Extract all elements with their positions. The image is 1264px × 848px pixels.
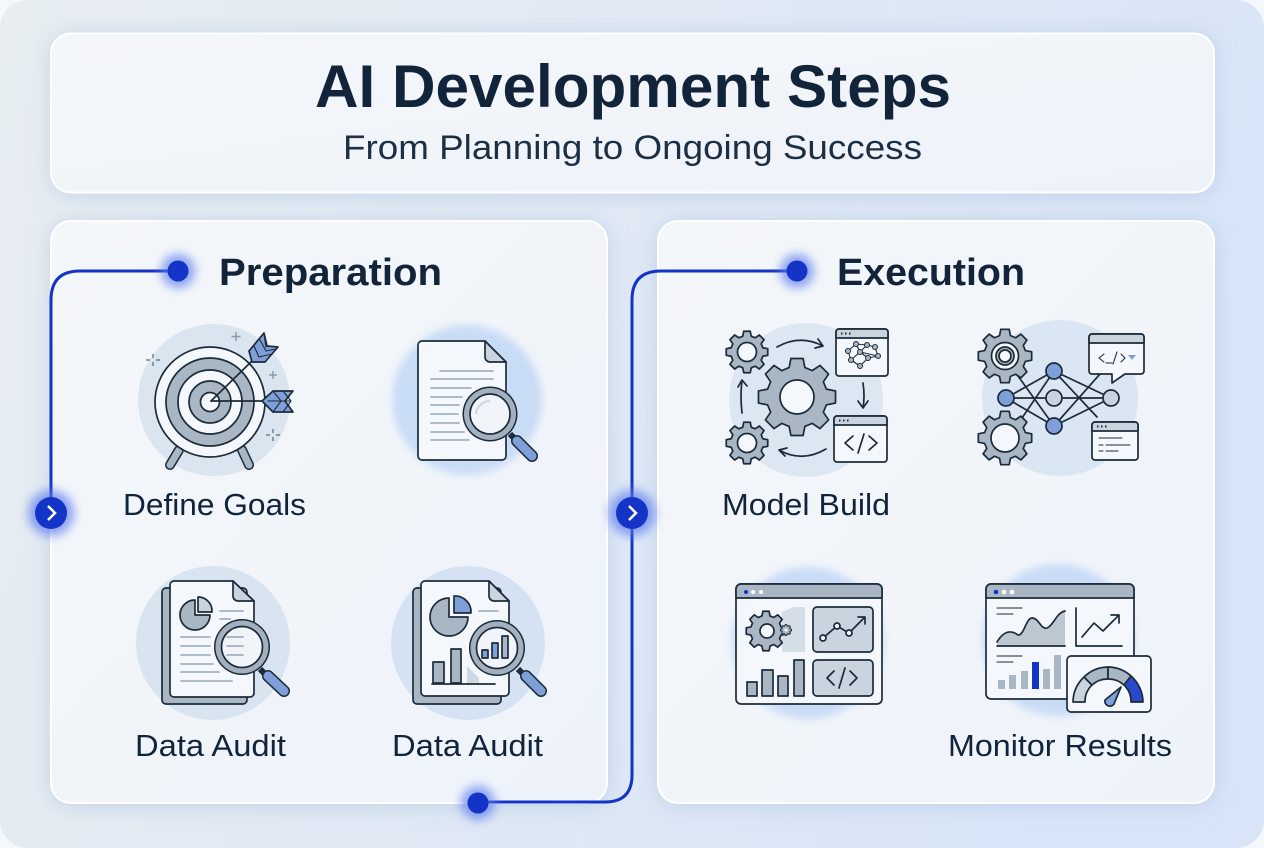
heading: main title: AI Development Steps <box>315 53 951 120</box>
node: preparation chevron <box>28 490 74 536</box>
icon: document with magnifier <box>392 325 542 475</box>
node: execution dot <box>780 254 814 288</box>
heading: execution: Execution <box>837 252 1025 294</box>
label: model build: Model Build <box>722 487 890 522</box>
panel: execution <box>658 221 1214 803</box>
connector: preparation flow <box>28 254 195 536</box>
label: monitor results: Monitor Results <box>948 728 1172 763</box>
node: preparation dot <box>161 254 195 288</box>
icon: gears cycle <box>726 323 888 477</box>
heading: preparation: Preparation <box>219 252 442 294</box>
panel: title <box>51 34 1214 192</box>
label: define goals: Define Goals <box>123 487 306 522</box>
icon: monitoring dashboard with gauge <box>982 564 1151 716</box>
icon: neural network <box>978 320 1144 476</box>
label: data audit left: Data Audit <box>135 728 286 763</box>
node: bottom dot <box>461 786 495 820</box>
connector: execution flow <box>461 254 814 820</box>
panel: preparation <box>51 221 607 803</box>
icon: charts with magnifier <box>391 566 545 720</box>
label: data audit right: Data Audit <box>392 728 543 763</box>
icon: target with arrows <box>138 324 293 476</box>
icon: reports with magnifier <box>136 566 290 720</box>
icon: dashboard <box>732 567 884 719</box>
subtitle: From Planning to Ongoing Success <box>343 129 922 167</box>
node: execution chevron <box>609 490 655 536</box>
